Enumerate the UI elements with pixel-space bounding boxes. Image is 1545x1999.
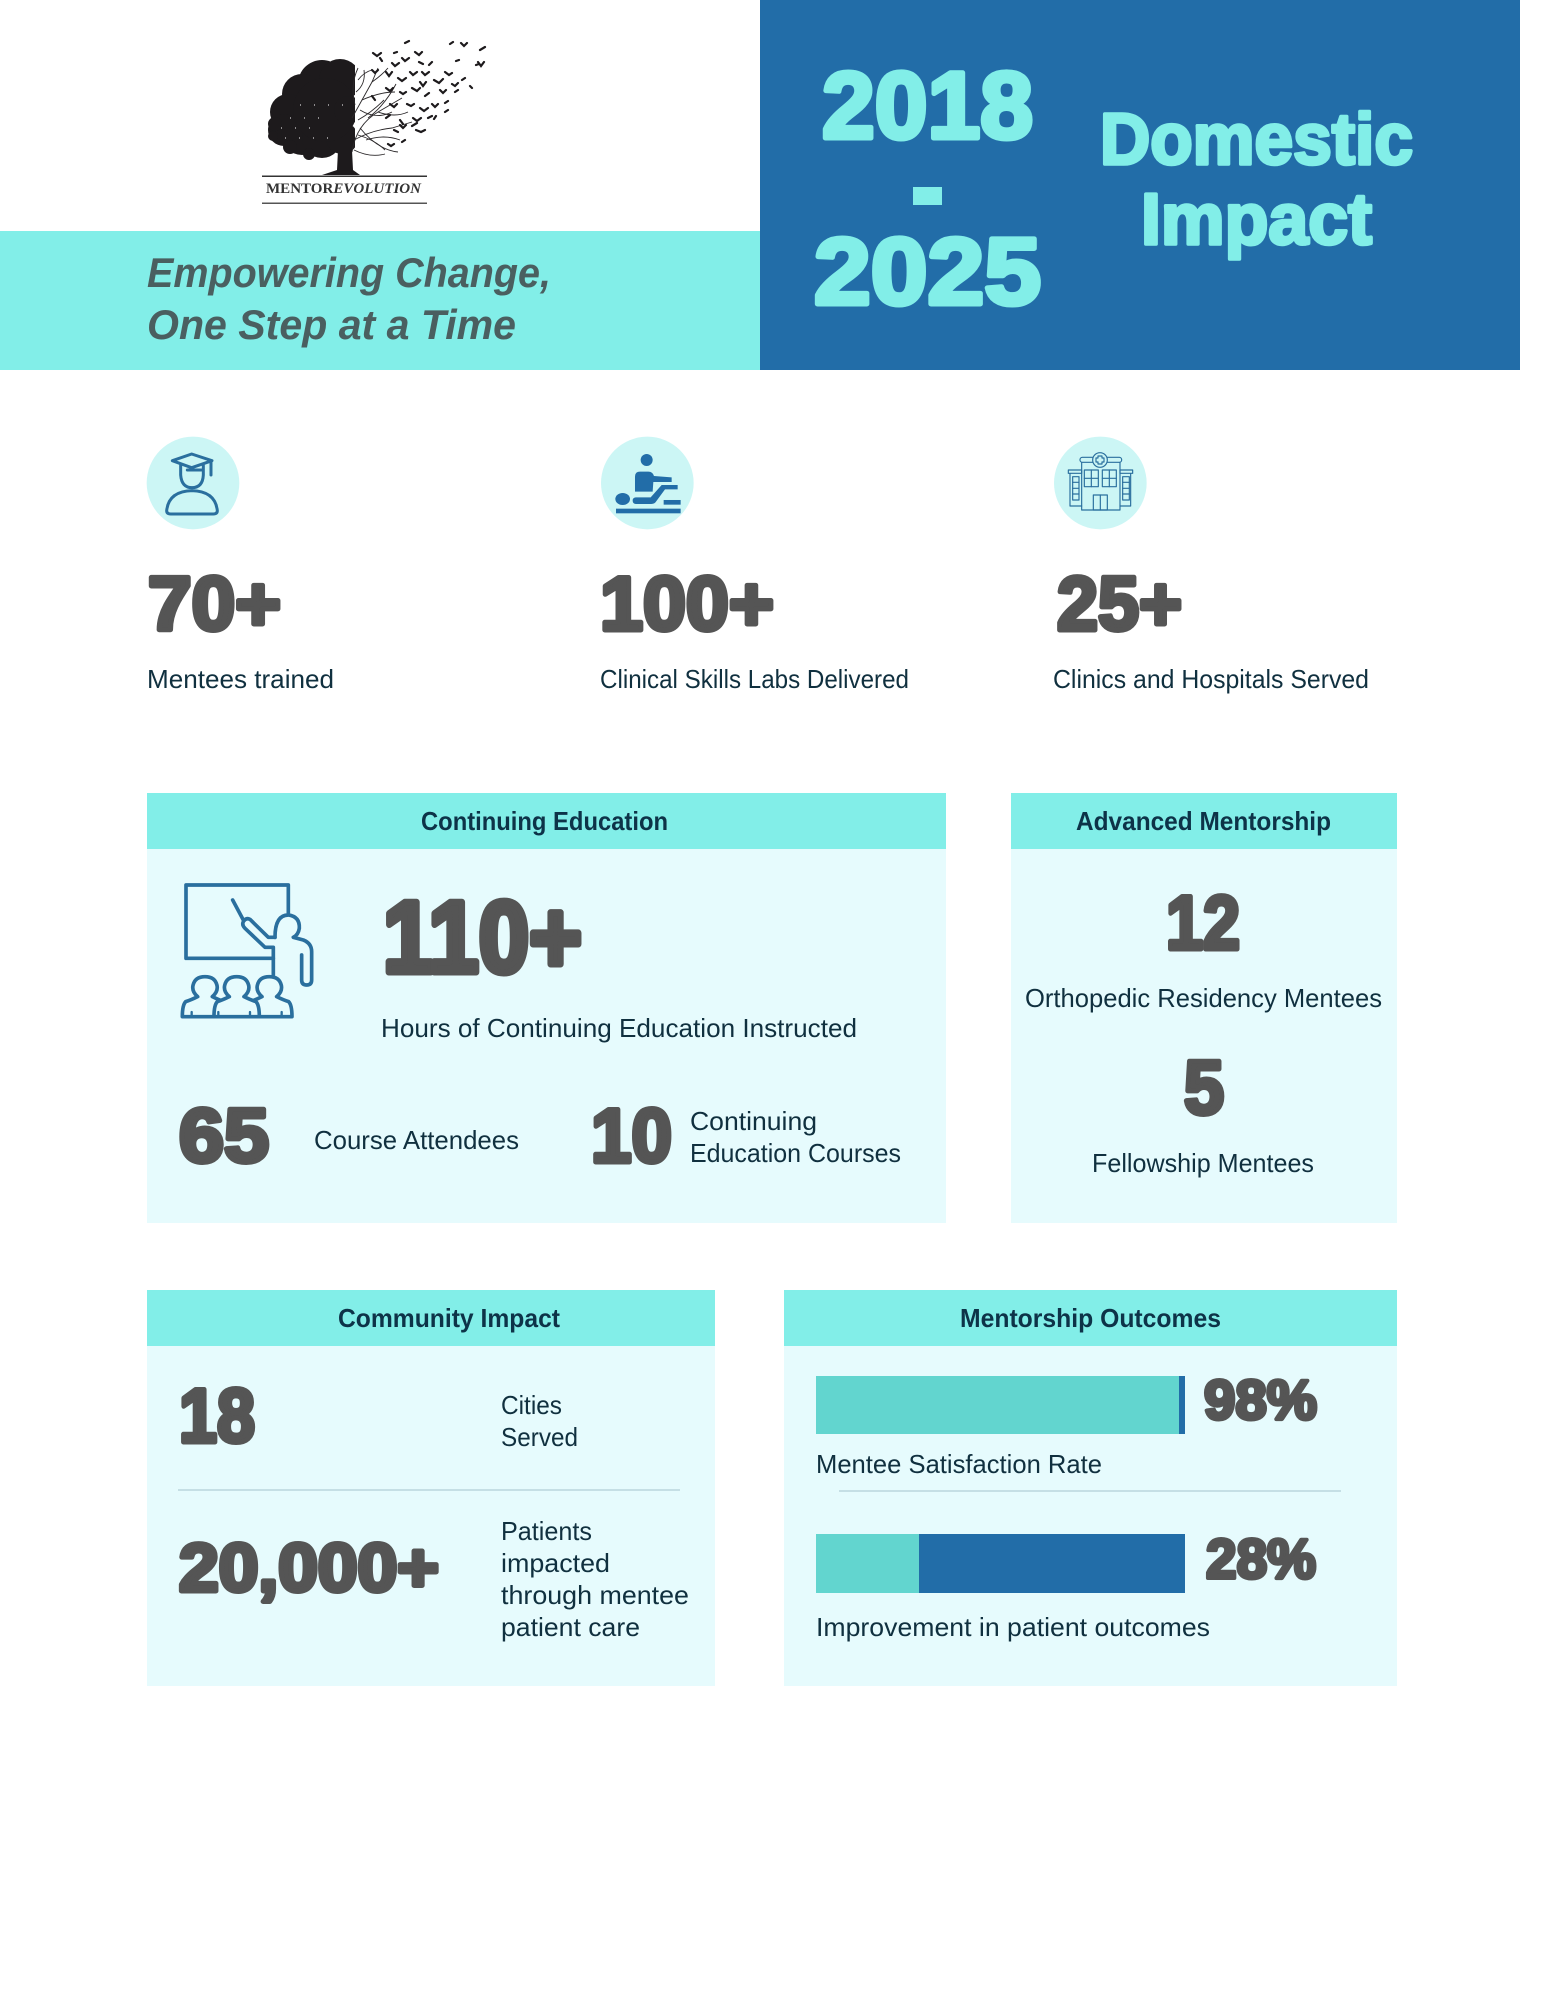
heading: Continuing Education	[421, 806, 668, 836]
label: patient outcomes: Improvement in patient outcomes	[816, 1612, 1210, 1642]
number: 70+	[148, 562, 281, 647]
heading: Advanced Mentorship	[1076, 806, 1331, 836]
logo: MentorEvolution tree and birds	[262, 41, 485, 204]
number: 110+: 110+	[383, 882, 582, 994]
title: Domestic Impact: Domestic	[1100, 100, 1413, 180]
panel: advanced mentorship	[1011, 793, 1397, 1223]
stat: mentees trained	[147, 437, 334, 694]
label: residency: Orthopedic Residency Mentees	[1025, 983, 1382, 1013]
logo rule top	[262, 176, 427, 177]
label: courses	[690, 1106, 901, 1168]
panel: mentorship outcomes	[784, 1290, 1397, 1686]
title: Domestic Impact: Impact	[1141, 180, 1372, 260]
number: 18: 18	[179, 1374, 255, 1459]
label: course attendees: Course Attendees	[314, 1125, 519, 1155]
number: 12: 12	[1166, 881, 1240, 966]
label: Clinics and Hospitals Served	[1053, 664, 1369, 694]
icon: physical therapy	[601, 437, 694, 529]
tagline text: Empowering Change,	[147, 249, 551, 296]
label: patients: Patients	[501, 1516, 592, 1546]
label: Clinical Skills Labs Delivered	[600, 664, 909, 694]
date range: 2018	[822, 53, 1033, 159]
number: 10: 10	[591, 1094, 672, 1179]
value: 28%: 28%	[1206, 1527, 1316, 1590]
wordmark: MENTOREVOLUTION	[266, 181, 422, 197]
date range: 2025	[814, 219, 1041, 325]
stat: clinical skills labs	[600, 437, 909, 694]
number: 65: 65	[179, 1094, 269, 1179]
icon: hospital	[1054, 437, 1147, 529]
title: Domestic Impact	[1100, 100, 1413, 260]
tagline text	[147, 249, 551, 348]
label: courses: Education Courses	[690, 1138, 901, 1168]
label: cities served: Cities	[501, 1390, 562, 1420]
panel: community impact	[147, 1290, 715, 1686]
label: cities served	[501, 1390, 578, 1452]
label: patients	[501, 1516, 689, 1642]
header panel: date range and title	[760, 0, 1520, 370]
icon: graduate	[147, 437, 239, 529]
tagline text: One Step at a Time	[147, 301, 516, 348]
tree foliage	[268, 59, 362, 160]
number: 100+	[600, 562, 774, 647]
flock of birds	[372, 41, 485, 146]
label: hours: Hours of Continuing Education Instructed	[381, 1013, 857, 1043]
value: 98%: 98%	[1204, 1368, 1317, 1431]
label: patients: through mentee	[501, 1580, 689, 1610]
logo rule bottom	[262, 202, 427, 204]
number: 25+	[1057, 562, 1182, 647]
label: fellowship: Fellowship Mentees	[1092, 1148, 1314, 1178]
label: satisfaction: Mentee Satisfaction Rate	[816, 1449, 1102, 1479]
bare branches	[352, 68, 412, 155]
heading: Community Impact	[338, 1303, 560, 1333]
label: patients: impacted	[501, 1548, 610, 1578]
tree trunk	[322, 150, 360, 175]
icon: teacher and audience	[182, 885, 312, 1017]
foliage speckles	[281, 105, 345, 138]
label: Mentees trained	[147, 664, 334, 694]
number: 20,000+: 20,000+	[179, 1530, 439, 1606]
header band: tagline	[0, 231, 760, 370]
date range	[814, 53, 1041, 325]
label: courses: Continuing	[690, 1106, 817, 1136]
bar: patient outcomes 28%	[816, 1534, 1185, 1593]
number: 5: 5	[1184, 1046, 1224, 1131]
bar: satisfaction 98%	[816, 1376, 1185, 1434]
label: cities served: Served	[501, 1422, 578, 1452]
heading: Mentorship Outcomes	[960, 1303, 1221, 1333]
label: patients: patient care	[501, 1612, 640, 1642]
stat: clinics and hospitals	[1053, 437, 1369, 694]
panel: continuing education	[147, 793, 946, 1223]
